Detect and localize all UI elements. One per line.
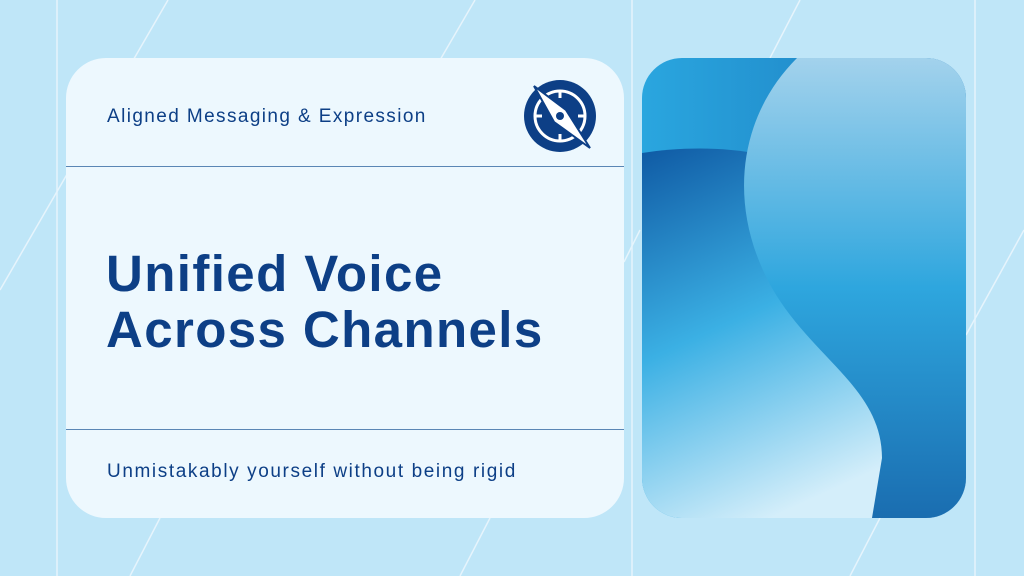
panel: abstract gradient [642, 58, 966, 518]
title [106, 245, 544, 358]
subtitle bottom: Unmistakably yourself without being rigid [107, 461, 517, 482]
panel: main card [66, 58, 624, 518]
icon: compass [524, 80, 596, 152]
subtitle top: Aligned Messaging & Expression [107, 106, 427, 127]
title: Unified Voice [106, 245, 443, 302]
title: Across Channels [106, 301, 544, 358]
